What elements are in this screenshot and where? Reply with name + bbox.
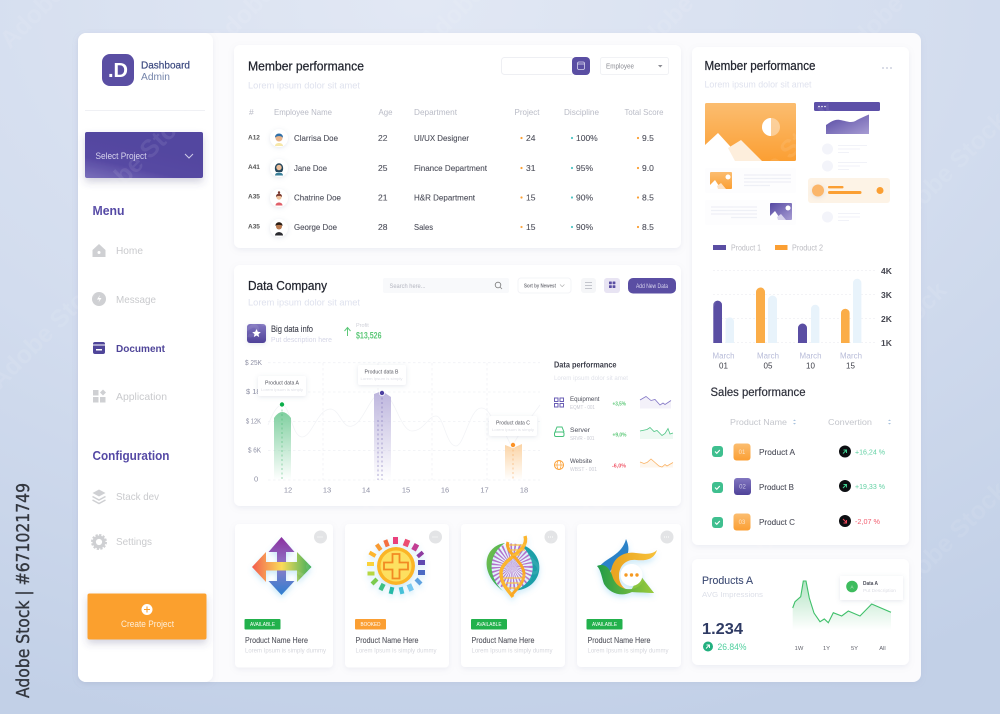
row: Jane Doe: 9.0 bbox=[642, 163, 654, 173]
add new data button: Add New Data bbox=[636, 284, 669, 290]
icon: dna logo bbox=[487, 536, 539, 597]
icon: four arrows logo bbox=[252, 537, 312, 595]
range labels bbox=[795, 646, 886, 652]
employee dropdown bbox=[600, 58, 668, 74]
growth bbox=[703, 642, 746, 652]
badge: booked: BOOKED bbox=[360, 622, 381, 628]
line chart bbox=[793, 581, 891, 652]
panel: sidebar bbox=[78, 33, 213, 682]
row: Chatrine Doe: 21 bbox=[378, 192, 388, 202]
row: Jane Doe bbox=[248, 159, 654, 177]
watermark overlay: Adobe Stock bbox=[604, 276, 732, 404]
metric: website bbox=[554, 458, 673, 473]
row: George Doe: A35 bbox=[248, 224, 260, 230]
chart legend: Product 1 bbox=[731, 244, 761, 252]
illustration: purple chart window bbox=[814, 102, 880, 134]
search box bbox=[383, 278, 509, 293]
table header: Employee Name bbox=[274, 107, 332, 117]
range labels: 1Y bbox=[823, 646, 830, 652]
range labels: 1W bbox=[795, 646, 804, 652]
metric: server: SRVR - 001 bbox=[570, 436, 595, 442]
product card 4 bbox=[577, 524, 681, 667]
watermark overlay: Adobe Stock bbox=[824, 276, 952, 404]
list view button bbox=[581, 278, 596, 293]
row: Chatrine Doe: 90% bbox=[576, 192, 593, 202]
bars: march 01 bbox=[713, 301, 734, 343]
badge: available: AVAILABLE bbox=[476, 622, 502, 628]
product name: Product Name Here bbox=[245, 635, 308, 645]
tooltip: data A: Put Description bbox=[863, 588, 896, 594]
brand text bbox=[141, 60, 190, 83]
date axis: 10 bbox=[806, 362, 815, 370]
watermark overlay: Adobe Stock bbox=[714, 96, 842, 224]
value axis: 4K bbox=[881, 266, 893, 276]
date axis: March bbox=[712, 352, 734, 360]
data point B bbox=[379, 390, 385, 396]
value axis: 3K bbox=[881, 290, 893, 300]
date axis: March bbox=[757, 352, 779, 360]
metric: website: Website bbox=[570, 458, 592, 465]
product name: Product Name Here bbox=[356, 635, 419, 645]
metric: server: Server bbox=[570, 427, 591, 434]
profit figure: $13,526 bbox=[356, 330, 382, 342]
profit figure: Profit bbox=[356, 323, 369, 329]
date axis bbox=[712, 352, 862, 370]
watermark overlay: Adobe Stock bbox=[714, 466, 842, 594]
badge: available: AVAILABLE bbox=[592, 622, 618, 628]
nav: message: Message bbox=[116, 294, 156, 306]
row: product C: -2,07 % bbox=[855, 517, 880, 526]
x axis labels: 13 bbox=[323, 486, 331, 494]
badge: available bbox=[586, 619, 622, 630]
product card 1 bbox=[235, 524, 333, 668]
heading: configuration: Configuration bbox=[92, 448, 170, 463]
select project button bbox=[85, 132, 203, 178]
table header bbox=[249, 107, 664, 117]
table heading: Member performance bbox=[248, 58, 364, 74]
product description: Lorem Ipsum is simply dummy bbox=[356, 648, 437, 654]
panel: member performance table bbox=[234, 45, 681, 248]
x axis labels: 16 bbox=[441, 486, 449, 494]
table header: Age bbox=[378, 107, 393, 117]
product card 3 bbox=[461, 524, 565, 667]
row: product B: 02 bbox=[739, 484, 746, 490]
table header: Discipline bbox=[564, 107, 599, 117]
badge: available: AVAILABLE bbox=[250, 622, 276, 628]
logo bbox=[102, 54, 134, 86]
product name: Product Name Here bbox=[588, 635, 651, 645]
metric: equipment: EQMT - 001 bbox=[570, 405, 595, 411]
product description: Lorem Ipsum is simply dummy bbox=[472, 648, 553, 654]
icon: rainbow hexagon cross logo bbox=[370, 540, 422, 591]
big data info bbox=[247, 324, 332, 344]
create project button bbox=[88, 594, 206, 640]
range labels: 5Y bbox=[851, 646, 858, 652]
tooltip: product data A bbox=[258, 376, 306, 396]
metric: website: WBST - 001 bbox=[570, 467, 597, 473]
logo: .D bbox=[108, 60, 128, 82]
y axis labels: 0 bbox=[254, 474, 258, 484]
row: Chatrine Doe: Chatrine Doe bbox=[294, 192, 341, 202]
watermark overlay: Adobe Stock bbox=[284, 466, 412, 594]
row: Chatrine Doe: A35 bbox=[248, 194, 260, 200]
brand text: Dashboard bbox=[141, 60, 190, 72]
y axis labels: $ 25K bbox=[245, 358, 262, 367]
product name: Product Name Here bbox=[472, 635, 535, 645]
tooltip: data A: A bbox=[850, 584, 854, 590]
panel: right column member and sales performance bbox=[692, 47, 909, 545]
row: George Doe: 90% bbox=[576, 222, 593, 232]
range labels: All bbox=[879, 646, 886, 652]
sales table header: Convertion bbox=[828, 417, 872, 427]
date axis: March bbox=[800, 352, 822, 360]
bars: march 15 bbox=[841, 279, 861, 343]
row: Clarrisa Doe: A12 bbox=[248, 134, 260, 142]
nav: stack dev bbox=[92, 490, 160, 504]
row: George Doe bbox=[248, 219, 654, 237]
icon: speech swoosh logo bbox=[597, 539, 657, 594]
more button bbox=[660, 530, 674, 544]
nav: application: Application bbox=[116, 391, 167, 403]
chart: data company area chart bbox=[245, 358, 540, 494]
row: Jane Doe: Finance Department bbox=[414, 163, 488, 173]
row: product C: Product C bbox=[759, 517, 795, 527]
more dots bbox=[882, 67, 892, 69]
create project button: Create Project bbox=[121, 619, 175, 629]
tooltip: product data B: Lorem Ipsum is simply bbox=[360, 376, 402, 381]
row: Clarrisa Doe: UI/UX Designer bbox=[414, 133, 469, 143]
data company heading: Data Company bbox=[248, 278, 327, 293]
row: Jane Doe: A41 bbox=[248, 164, 260, 171]
data company subtitle: Lorem ipsum dolor sit amet bbox=[248, 298, 360, 308]
big number: 1.234 bbox=[702, 621, 743, 638]
row: Jane Doe: 31 bbox=[526, 163, 536, 173]
row: George Doe: George Doe bbox=[294, 222, 337, 232]
metric: server: +9,0% bbox=[612, 432, 626, 438]
row: product B bbox=[712, 478, 885, 495]
product description: Lorem Ipsum is simply dummy bbox=[245, 648, 327, 654]
value axis: 1K bbox=[881, 338, 893, 348]
data point A bbox=[279, 402, 285, 407]
sort dropdown bbox=[518, 278, 571, 293]
row: product B: Product B bbox=[759, 482, 794, 492]
tooltip: data A: Data A bbox=[863, 581, 878, 587]
watermark overlay: Adobe Stock bbox=[174, 276, 302, 404]
profit figure bbox=[344, 323, 382, 342]
row: product C bbox=[712, 514, 880, 530]
illustration: list rows bbox=[822, 144, 867, 222]
bar chart bbox=[712, 266, 893, 370]
nav: settings bbox=[92, 535, 152, 549]
sort dropdown: Sort by Newest bbox=[524, 284, 556, 290]
y axis labels: $ 12K bbox=[246, 416, 261, 426]
nav: application bbox=[93, 390, 167, 403]
watermark overlay: Adobe Stock bbox=[504, 106, 632, 234]
watermark overlay: Adobe Stock bbox=[394, 276, 522, 404]
date input bbox=[502, 57, 590, 75]
value axis bbox=[881, 266, 893, 348]
sales table header bbox=[730, 417, 891, 427]
x axis labels: 14 bbox=[362, 486, 370, 494]
data performance list bbox=[554, 360, 673, 473]
row: Chatrine Doe: 15 bbox=[526, 192, 536, 202]
nav: document (active) bbox=[93, 342, 165, 355]
table header: Total Score bbox=[624, 107, 664, 117]
select project button: Select Project bbox=[96, 151, 147, 161]
row: Clarrisa Doe bbox=[248, 129, 654, 147]
row: product A: +16,24 % bbox=[855, 448, 885, 456]
x axis labels: 12 bbox=[284, 486, 292, 494]
right panel subtitle: Lorem ipsum dolor sit amet bbox=[704, 80, 812, 90]
metric: website: -6,0% bbox=[612, 464, 626, 470]
row: Jane Doe: 25 bbox=[378, 163, 388, 173]
bars: march 10 bbox=[798, 305, 819, 343]
date axis: 05 bbox=[764, 362, 773, 370]
row: Clarrisa Doe: 22 bbox=[378, 133, 388, 143]
tooltip: product data C: Lorem Ipsum is simply bbox=[492, 427, 534, 432]
product card 2 bbox=[345, 524, 449, 668]
watermark overlay: Adobe Stock bbox=[284, 106, 412, 234]
metric: equipment bbox=[554, 396, 671, 411]
tooltip: product data B bbox=[358, 365, 406, 385]
panel: products A bbox=[692, 559, 909, 665]
illustration: image cards bbox=[705, 103, 796, 225]
main dashboard panel bbox=[78, 33, 921, 682]
row: Chatrine Doe: 8.5 bbox=[642, 192, 654, 202]
tooltip: product data A: Product data A bbox=[265, 380, 299, 386]
row: Chatrine Doe: H&R Department bbox=[414, 192, 476, 202]
illustration: highlighted row bbox=[808, 178, 890, 203]
data point C bbox=[510, 442, 516, 448]
tooltip: data A bbox=[840, 576, 903, 603]
x axis labels bbox=[284, 486, 528, 494]
nav: home: Home bbox=[116, 245, 143, 257]
employee dropdown: Employee bbox=[606, 64, 634, 70]
badge: available bbox=[244, 619, 280, 630]
panel: data company bbox=[234, 265, 681, 506]
y axis labels bbox=[245, 358, 262, 484]
row: product A: Product A bbox=[759, 447, 795, 457]
grid view button bbox=[604, 278, 620, 293]
metric: equipment: +3,5% bbox=[612, 402, 626, 408]
x axis labels: 18 bbox=[520, 486, 528, 494]
product description: Lorem Ipsum is simply dummy bbox=[588, 648, 669, 654]
row: Clarrisa Doe: 24 bbox=[526, 133, 536, 143]
date axis: 15 bbox=[846, 362, 855, 370]
row: Clarrisa Doe: 9.5 bbox=[642, 133, 654, 143]
sales performance heading: Sales performance bbox=[710, 387, 806, 399]
date axis: March bbox=[840, 352, 862, 360]
y axis labels: $ 6K bbox=[248, 446, 261, 454]
nav: stack dev: Stack dev bbox=[116, 491, 160, 503]
row: Clarrisa Doe: 100% bbox=[576, 133, 598, 143]
tooltip: product data A: Lorem Ipsum is simply bbox=[261, 387, 303, 392]
row: product A: 01 bbox=[739, 450, 746, 456]
x axis labels: 15 bbox=[402, 486, 410, 494]
date axis: 01 bbox=[719, 362, 728, 370]
row: Chatrine Doe bbox=[248, 189, 654, 207]
value axis: 2K bbox=[881, 314, 893, 324]
watermark overlay: Adobe Stock bbox=[74, 466, 202, 594]
data performance list: Data performance bbox=[554, 360, 617, 370]
sales table header: Product Name bbox=[730, 417, 787, 427]
impressions label: AVG Impressions bbox=[702, 590, 763, 599]
row: product A bbox=[712, 444, 885, 460]
row: product C: 03 bbox=[739, 520, 746, 526]
more button bbox=[314, 530, 327, 544]
tooltip: product data C: Product data C bbox=[496, 420, 530, 426]
badge: booked bbox=[355, 619, 386, 630]
brand text: Admin bbox=[141, 71, 170, 83]
row: Jane Doe: 95% bbox=[576, 163, 593, 173]
search box: Search here... bbox=[390, 283, 426, 290]
nav: document (active): Document bbox=[116, 343, 165, 355]
nav: home bbox=[92, 244, 143, 257]
badge: available bbox=[471, 619, 507, 630]
table header: Project bbox=[514, 107, 540, 117]
row: product B: +19,33 % bbox=[855, 482, 885, 491]
y axis labels: $ 18 bbox=[246, 387, 261, 396]
row: George Doe: 28 bbox=[378, 222, 388, 232]
nav: settings: Settings bbox=[116, 536, 152, 548]
heading: menu: Menu bbox=[92, 203, 125, 218]
watermark overlay: Adobe Stock bbox=[504, 466, 632, 594]
row: Clarrisa Doe: Clarrisa Doe bbox=[294, 133, 338, 143]
growth: 26.84% bbox=[718, 642, 746, 652]
bars: march 05 bbox=[756, 288, 777, 343]
right panel heading: Member performance bbox=[704, 58, 816, 73]
row: George Doe: 15 bbox=[526, 222, 536, 232]
products A heading: Products A bbox=[702, 575, 754, 587]
row: Jane Doe: Jane Doe bbox=[294, 163, 327, 173]
nav: message bbox=[92, 292, 156, 306]
data performance list: Lorem ipsum dolor sit amet bbox=[554, 375, 628, 382]
add new data button bbox=[628, 278, 676, 294]
chart legend: Product 2 bbox=[792, 244, 823, 252]
side credit text: Adobe Stock | #671021749 bbox=[14, 483, 34, 698]
watermark overlay: Adobe Stock bbox=[74, 96, 202, 224]
table subtitle: Lorem ipsum dolor sit amet bbox=[248, 80, 360, 92]
tooltip: product data B: Product data B bbox=[364, 370, 399, 376]
row: George Doe: Sales bbox=[414, 222, 433, 232]
x axis labels: 17 bbox=[480, 486, 489, 494]
table header: Department bbox=[414, 107, 458, 117]
tooltip: product data C bbox=[489, 416, 537, 436]
big data info: Put description here bbox=[271, 337, 332, 344]
more button bbox=[429, 530, 442, 544]
more button bbox=[544, 530, 558, 544]
chart legend bbox=[713, 244, 823, 252]
big data info: Big data info bbox=[271, 324, 313, 334]
metric: server bbox=[554, 427, 673, 442]
table header: # bbox=[249, 107, 254, 117]
metric: equipment: Equipment bbox=[570, 396, 600, 403]
row: George Doe: 8.5 bbox=[642, 222, 654, 232]
